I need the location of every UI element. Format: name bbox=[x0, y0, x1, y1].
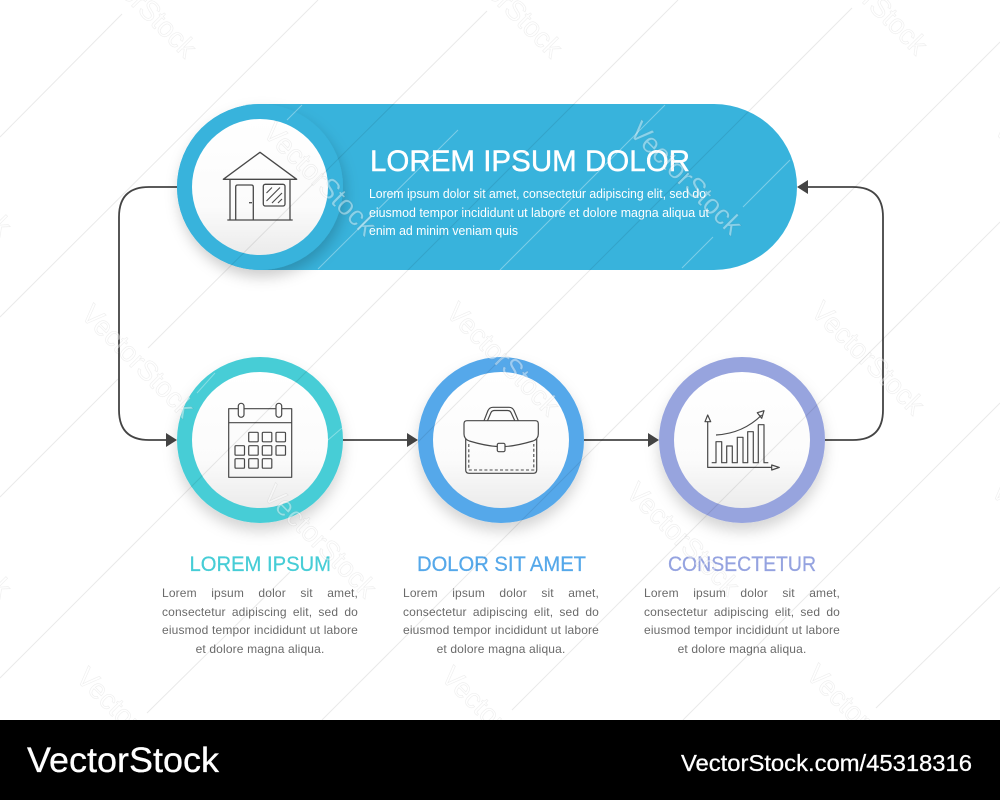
step 3 text block: eiusmod tempor incididunt ut labore bbox=[644, 623, 840, 637]
circle: growth chart bbox=[659, 357, 825, 523]
watermark overlay: VectorStock bbox=[623, 115, 749, 241]
step 3 heading: CONSECTETUR bbox=[668, 553, 816, 576]
step 1 text block: consectetur adipiscing elit, sed do bbox=[162, 605, 358, 619]
step 3 text block: consectetur adipiscing elit, sed do bbox=[644, 605, 840, 619]
connector: chart back to top panel bbox=[797, 180, 883, 440]
watermark overlay: VectorStock bbox=[805, 295, 931, 421]
panel body text bbox=[369, 187, 710, 238]
panel heading: LOREM IPSUM DOLOR bbox=[370, 145, 690, 178]
circle: house bbox=[177, 104, 343, 270]
panel body text: eiusmod tempor incididunt ut labore et dolore magna aliqua ut bbox=[369, 206, 710, 220]
step 3 text block bbox=[644, 586, 840, 656]
connector: briefcase to chart bbox=[584, 433, 659, 447]
step 3 text block: et dolore magna aliqua. bbox=[678, 642, 806, 656]
icon: growth chart bbox=[705, 411, 779, 470]
step 1 heading: LOREM IPSUM bbox=[190, 553, 331, 576]
step 2 text block: consectetur adipiscing elit, sed do bbox=[403, 605, 599, 619]
connector: calendar to briefcase bbox=[343, 433, 418, 447]
step 2 text block: et dolore magna aliqua. bbox=[437, 642, 565, 656]
watermark overlay: VectorStock bbox=[620, 476, 746, 602]
step 2 heading: DOLOR SIT AMET bbox=[417, 553, 586, 576]
watermark overlay: VectorStock bbox=[440, 296, 566, 422]
watermark overlay: VectorStock bbox=[257, 478, 383, 604]
step 2 text block: Lorem ipsum dolor sit amet, bbox=[403, 586, 599, 600]
footer image id: VectorStock.com/45318316 bbox=[681, 750, 972, 776]
step 1 text block: eiusmod tempor incididunt ut labore bbox=[162, 623, 358, 637]
step 2 text block bbox=[403, 586, 599, 656]
watermark overlay: VectorStock bbox=[257, 116, 383, 242]
footer brand: VectorStock bbox=[27, 741, 220, 780]
connector: house to calendar bbox=[119, 187, 178, 447]
step 3 text block: Lorem ipsum dolor sit amet, bbox=[644, 586, 840, 600]
icon: calendar bbox=[229, 403, 292, 477]
circle: calendar bbox=[177, 357, 343, 523]
watermark overlay: VectorStock bbox=[75, 298, 201, 424]
step 1 text block: et dolore magna aliqua. bbox=[196, 642, 324, 656]
icon: briefcase bbox=[464, 407, 538, 473]
step 1 text block bbox=[162, 586, 358, 656]
panel: top blue pill bbox=[177, 104, 797, 270]
panel body text: Lorem ipsum dolor sit amet, consectetur adipiscing elit, sed do bbox=[369, 187, 706, 201]
step 1 text block: Lorem ipsum dolor sit amet, bbox=[162, 586, 358, 600]
circle: briefcase bbox=[418, 357, 584, 523]
icon: house bbox=[223, 152, 297, 220]
footer band bbox=[0, 720, 1000, 800]
step 2 text block: eiusmod tempor incididunt ut labore bbox=[403, 623, 599, 637]
panel body text: enim ad minim veniam quis bbox=[369, 224, 518, 238]
